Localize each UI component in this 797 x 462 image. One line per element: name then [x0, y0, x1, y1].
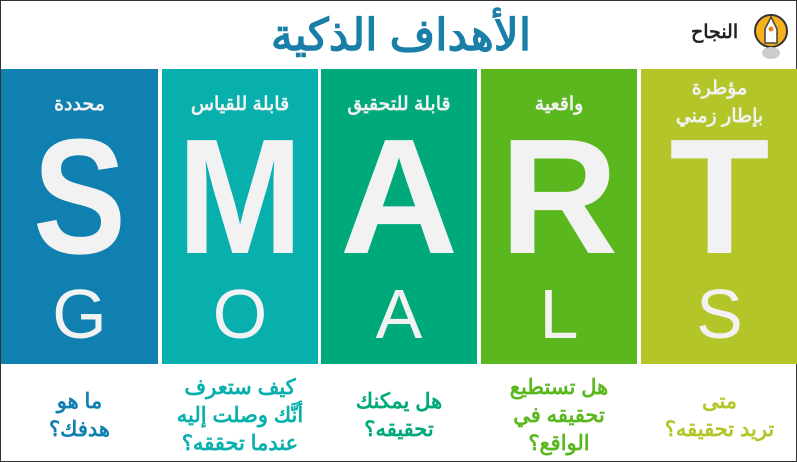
- panel: specific: محددة: [54, 94, 105, 115]
- question: realistic: هل تستطيع: [510, 376, 608, 398]
- panel: measurable: [162, 69, 318, 364]
- question: achievable: [356, 390, 442, 440]
- question: realistic: [510, 376, 608, 456]
- panel: measurable: M: [177, 105, 303, 288]
- panel: realistic: [481, 69, 637, 364]
- panel: time-bound: S: [696, 275, 743, 353]
- question: measurable: عندما تحققه؟: [182, 432, 298, 454]
- question: measurable: [177, 376, 303, 454]
- question: realistic: الواقع؟: [528, 432, 590, 454]
- panel: specific: [1, 69, 158, 364]
- panel: measurable: قابلة للقياس: [191, 94, 289, 115]
- title: الأهداف الذكية: [271, 11, 531, 60]
- panel: time-bound: T: [669, 105, 770, 288]
- panel: specific: G: [52, 275, 107, 353]
- question: specific: هدفك؟: [49, 418, 110, 440]
- panel: measurable: O: [213, 275, 267, 353]
- question: specific: ما هو: [57, 390, 102, 412]
- question: achievable: هل يمكنك: [356, 390, 442, 412]
- icon: rocket: [754, 14, 788, 59]
- panel: achievable: [321, 69, 477, 364]
- panel: achievable: A: [376, 275, 422, 353]
- panel: achievable: A: [340, 105, 458, 288]
- panel: time-bound: مؤطرة: [692, 78, 747, 99]
- panel: realistic: L: [540, 275, 578, 353]
- question: realistic: تحقيقه في: [513, 404, 605, 426]
- panel: time-bound: بإطار زمني: [676, 106, 763, 127]
- question: measurable: كيف ستعرف: [184, 376, 296, 398]
- panel: realistic: R: [500, 105, 618, 288]
- panel: time-bound: [641, 69, 797, 364]
- logo text: النجاح: [691, 22, 738, 43]
- panel: realistic: واقعية: [535, 94, 583, 115]
- panel: specific: S: [33, 105, 126, 288]
- question: time-bound: متى: [702, 390, 737, 412]
- question: measurable: أنَّك وصلت إليه: [177, 404, 303, 426]
- logo: [691, 14, 788, 59]
- question: time-bound: تريد تحقيقه؟: [665, 418, 774, 440]
- panel: achievable: قابلة للتحقيق: [347, 94, 451, 115]
- question: time-bound: [665, 390, 774, 442]
- question: achievable: تحقيقه؟: [364, 418, 434, 440]
- question: specific: [49, 390, 110, 440]
